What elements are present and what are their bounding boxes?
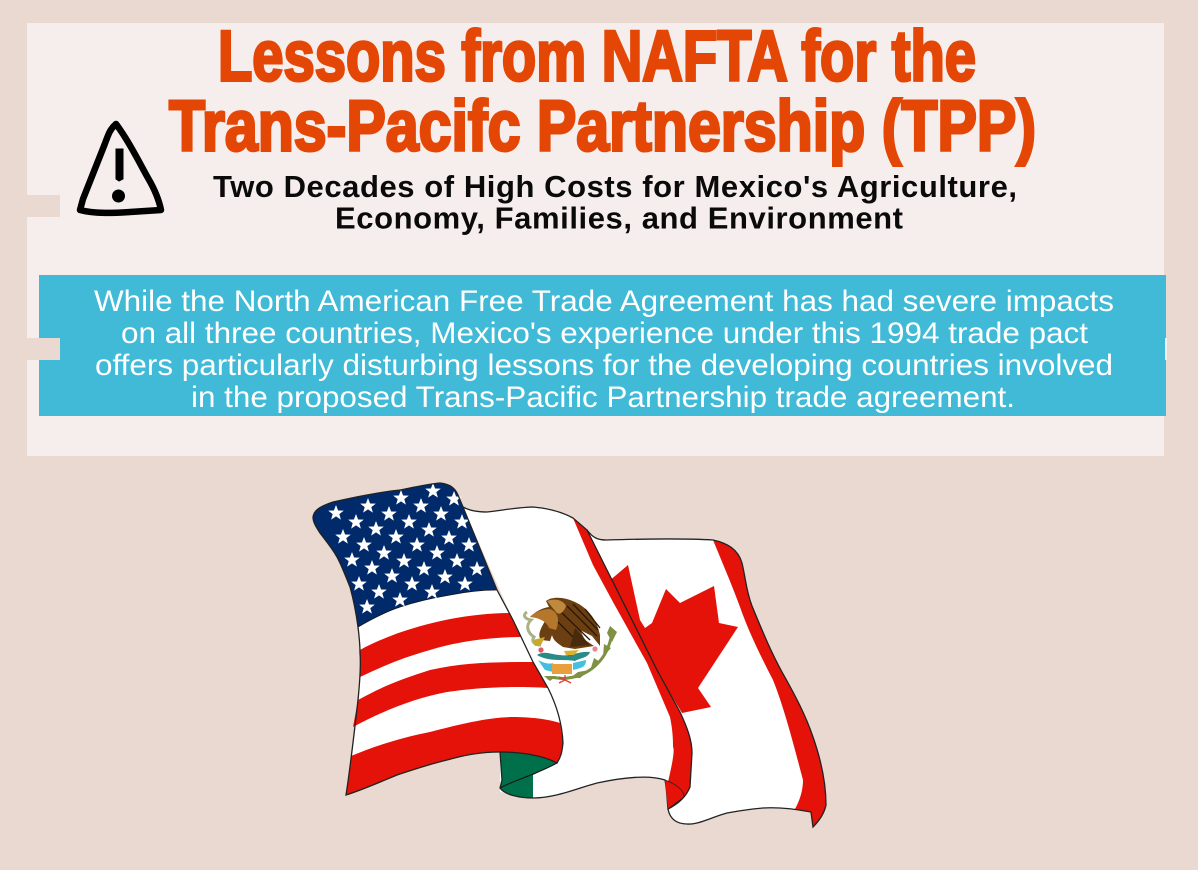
title: Trans-Pacifc Partnership (TPP): [169, 88, 1036, 166]
intro paragraph: While the North American Free Trade Agreement has had severe impacts: [94, 285, 1114, 318]
flag: Canada: [587, 530, 826, 827]
panel: intro text band: [27, 275, 1167, 416]
subtitle: [213, 169, 1017, 236]
stars: [328, 483, 485, 614]
illustration: NAFTA flags: [313, 483, 826, 827]
icon: maple leaf: [608, 565, 738, 713]
stripes: [360, 613, 521, 677]
canton: [313, 483, 497, 627]
subtitle: Economy, Families, and Environment: [335, 200, 903, 236]
title: Lessons from NAFTA for the: [218, 18, 976, 96]
intro paragraph: [94, 285, 1114, 414]
flag: Mexico: [463, 507, 692, 809]
intro paragraph: offers particularly disturbing lessons for the developing countries involved: [95, 349, 1113, 382]
icon: Mexican coat of arms: [524, 598, 617, 683]
flag: United States: [313, 483, 563, 795]
panel: header: [27, 18, 1167, 456]
intro paragraph: in the proposed Trans-Pacific Partnership trade agreement.: [191, 381, 1015, 414]
subtitle: Two Decades of High Costs for Mexico's Agriculture,: [213, 169, 1017, 204]
icon: warning triangle: [80, 124, 161, 213]
title: [169, 18, 1036, 166]
intro paragraph: on all three countries, Mexico's experience under this 1994 trade pact: [121, 317, 1088, 350]
